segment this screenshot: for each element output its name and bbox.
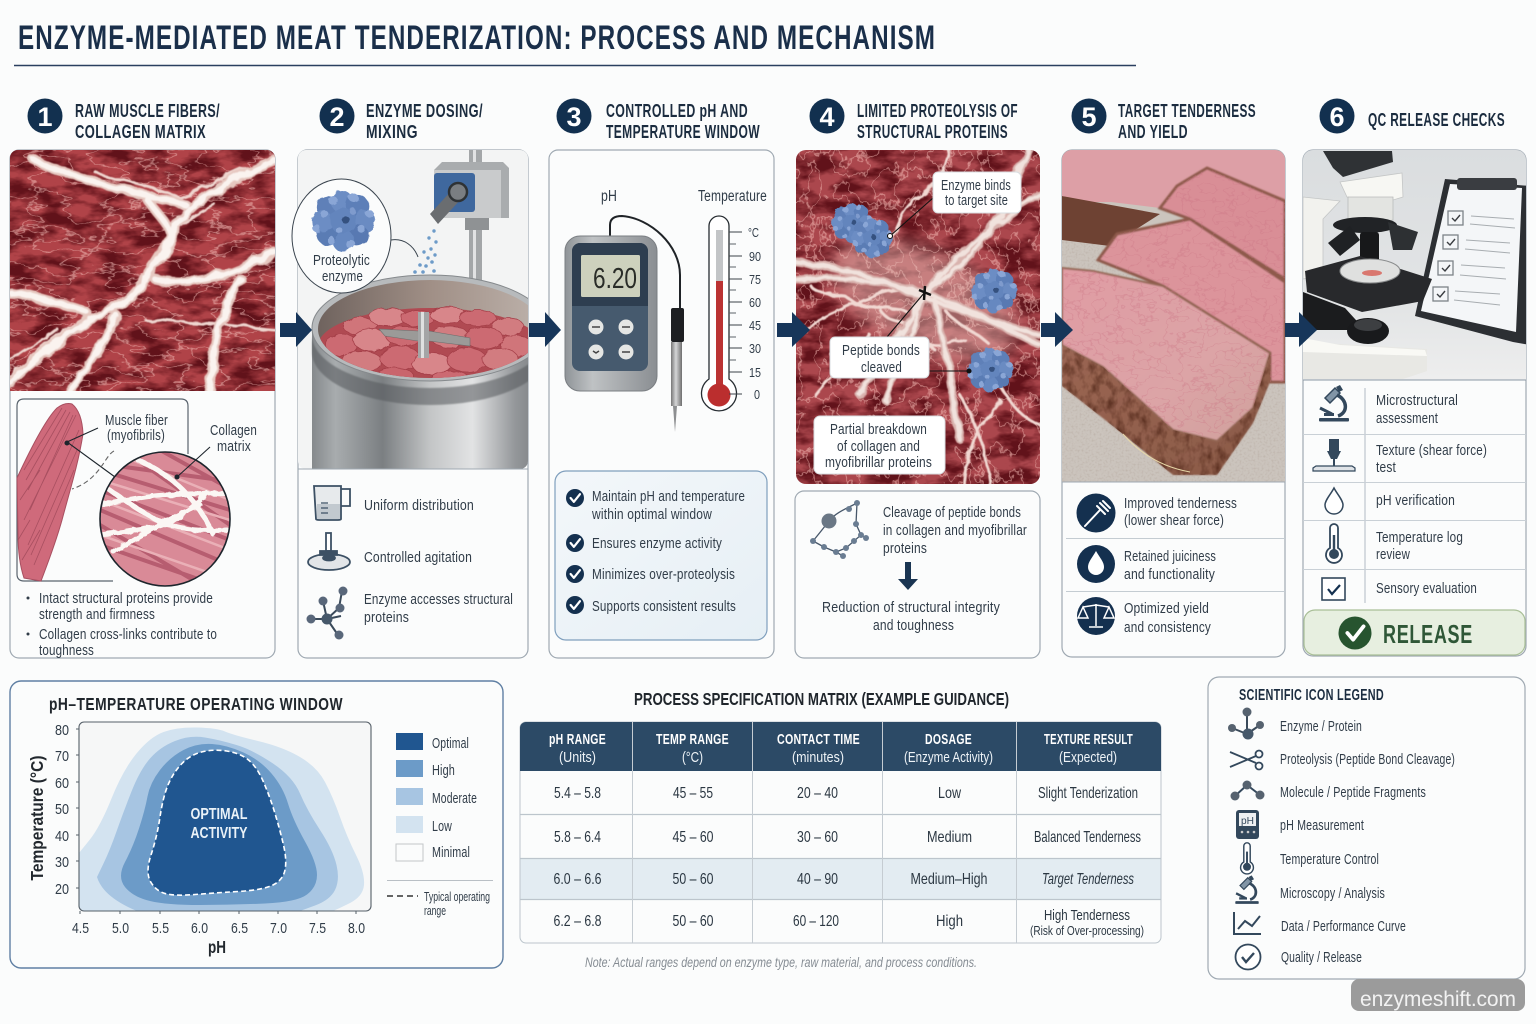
enzyme molecule upper left xyxy=(832,203,893,258)
step 6 heading xyxy=(1320,98,1505,134)
enzyme bubble callout: Proteolytic xyxy=(313,253,370,269)
icon: peptide fragment xyxy=(1230,780,1264,800)
enzyme molecule xyxy=(312,190,375,252)
table header xyxy=(549,732,1133,766)
thermometer: 75 xyxy=(749,272,761,287)
icon: enzyme protein xyxy=(1228,708,1264,740)
x axis labels: 6.5 xyxy=(231,920,248,937)
text: texture: Texture (shear force) xyxy=(1376,443,1487,459)
enzyme bubble callout: enzyme xyxy=(322,269,363,285)
icon: drop xyxy=(1077,545,1115,583)
labels: (myofibrils) xyxy=(107,428,165,444)
thermometer: °C xyxy=(748,225,759,240)
text: reduction xyxy=(822,600,1000,634)
row 3 highlighted xyxy=(554,871,1134,888)
row 4: High xyxy=(936,913,963,930)
row 4: 50 – 60 xyxy=(672,913,714,930)
step 2 heading xyxy=(320,98,483,142)
row 1: 45 – 55 xyxy=(673,785,713,802)
text: pH verification: pH verification xyxy=(1376,493,1455,509)
label: pH: pH xyxy=(601,188,617,205)
checklist text: Supports consistent results xyxy=(592,599,736,615)
row 1 xyxy=(554,785,1138,802)
step 1 heading xyxy=(28,98,220,142)
watermark: enzymeshift.com xyxy=(1360,988,1516,1011)
text: texture: test xyxy=(1376,460,1396,476)
check 1 xyxy=(566,489,584,507)
text: cleavage: Cleavage of peptide bonds xyxy=(883,505,1021,521)
bullet text: Collagen cross-links contribute to xyxy=(39,627,217,643)
scientific icon legend xyxy=(1208,677,1525,979)
callout: checklist xyxy=(555,471,767,640)
step 4 heading: LIMITED PROTEOLYSIS OF xyxy=(857,100,1018,121)
chart legend: Minimal xyxy=(432,845,470,861)
table header: (Expected) xyxy=(1059,750,1117,766)
icon: quality xyxy=(1236,944,1260,970)
callout: peptide bonds: Peptide bonds xyxy=(842,343,920,359)
y axis labels: 70 xyxy=(55,748,69,765)
icon: sensory check box xyxy=(1322,578,1345,600)
table header: (°C) xyxy=(682,750,703,766)
table header: DOSAGE xyxy=(925,732,972,748)
checklist text: Maintain pH and temperature xyxy=(592,489,745,505)
y axis labels: 40 xyxy=(55,828,69,845)
text: retained juiciness: and functionality xyxy=(1124,567,1215,583)
microscope xyxy=(1303,151,1432,379)
row 3 highlighted: Medium–High xyxy=(910,871,988,888)
chart legend: Typical operating xyxy=(424,890,490,904)
icon: droplet xyxy=(1325,488,1343,514)
center label: ACTIVITY xyxy=(190,825,248,842)
icon: beaker xyxy=(314,486,350,520)
row 3 highlighted: 6.0 – 6.6 xyxy=(554,871,602,888)
step 3 heading: 3 xyxy=(566,102,582,132)
photo: sliced steak xyxy=(1062,150,1285,482)
callout: peptide bonds: cleaved xyxy=(861,360,902,376)
clipboard xyxy=(1415,178,1530,345)
step 1 heading: 1 xyxy=(37,102,53,132)
row 2 xyxy=(554,829,1141,846)
table title: PROCESS SPECIFICATION MATRIX (EXAMPLE GUIDANCE) xyxy=(634,689,1009,709)
center label: OPTIMAL xyxy=(190,806,248,823)
chart legend: Optimal xyxy=(432,736,469,752)
bullet text: strength and firmness xyxy=(39,607,155,623)
x axis labels: 7.0 xyxy=(270,920,287,937)
step 5 column xyxy=(1062,98,1285,657)
row 4 xyxy=(554,907,1144,938)
x axis labels: 8.0 xyxy=(348,920,365,937)
panel: QC release xyxy=(1303,150,1526,656)
text: temperature control: Temperature Control xyxy=(1280,852,1379,868)
x axis labels: 5.0 xyxy=(112,920,129,937)
thermometer: 0 xyxy=(754,387,760,402)
thermometer: 30 xyxy=(749,341,761,356)
table header: TEXTURE RESULT xyxy=(1044,732,1133,748)
text: proteolysis: Proteolysis (Peptide Bond Cleavage) xyxy=(1280,752,1455,768)
step 6 heading: 6 xyxy=(1329,102,1345,132)
icon: pH device xyxy=(1236,810,1259,839)
icon: pH device: pH xyxy=(1241,816,1254,827)
checklist text: Ensures enzyme activity xyxy=(592,536,722,552)
icon: shear force probe xyxy=(1313,439,1355,471)
row 4: High Tenderness xyxy=(1044,907,1130,924)
y axis labels: 60 xyxy=(55,775,69,792)
row 3 highlighted: Target Tenderness xyxy=(1042,871,1134,888)
text: sensory evaluation: Sensory evaluation xyxy=(1376,581,1477,597)
table header: CONTACT TIME xyxy=(777,732,860,748)
label: temperature: Temperature xyxy=(698,188,767,205)
icon: scissors xyxy=(1230,750,1262,770)
text: reduction: Reduction of structural integrity xyxy=(822,600,1000,616)
labels xyxy=(105,413,257,455)
text: cleavage: in collagen and myofibrillar xyxy=(883,523,1027,539)
step 6 column xyxy=(1303,98,1530,656)
enzyme bubble callout xyxy=(292,179,418,293)
text: optimized yield xyxy=(1124,601,1211,636)
row 2: 5.8 – 6.4 xyxy=(554,829,601,846)
row 1: 5.4 – 5.8 xyxy=(554,785,601,802)
text: molecule: Molecule / Peptide Fragments xyxy=(1280,785,1426,801)
text: temperature log: review xyxy=(1376,547,1410,563)
row 3 highlighted: 40 – 90 xyxy=(797,871,838,888)
checklist text: within optimal window xyxy=(591,507,712,523)
y axis labels: 80 xyxy=(55,722,69,739)
callout: partial breakdown: myofibrillar proteins xyxy=(825,455,932,471)
watermark xyxy=(1351,979,1525,1011)
arrow 1 to 2 xyxy=(280,312,312,347)
x axis labels: 4.5 xyxy=(72,920,89,937)
row 2: 30 – 60 xyxy=(797,829,838,846)
center label xyxy=(190,806,248,842)
panel: pH temperature chart xyxy=(10,681,503,968)
chart legend: Low xyxy=(432,819,452,835)
arrow 2 to 3 xyxy=(529,312,561,347)
table xyxy=(520,722,1161,943)
table header: (minutes) xyxy=(792,750,844,766)
text: quality: Quality / Release xyxy=(1281,950,1362,966)
step 4 heading: STRUCTURAL PROTEINS xyxy=(857,121,1008,142)
legend title: SCIENTIFIC ICON LEGEND xyxy=(1239,687,1384,704)
stainless steel pot with meat xyxy=(312,275,548,469)
check 2 xyxy=(566,534,584,552)
y axis labels: 30 xyxy=(55,854,69,871)
icon: temperature xyxy=(1241,843,1253,874)
photo: microscope and clipboard xyxy=(1303,150,1530,380)
step 2 heading: ENZYME DOSING/ xyxy=(366,100,483,121)
text: improved tenderness: Improved tenderness xyxy=(1124,496,1237,512)
callout: enzyme binds: Enzyme binds xyxy=(941,178,1011,194)
icon: thermometer xyxy=(1326,524,1342,563)
arrow 4 to 5 xyxy=(1041,312,1073,347)
illustration: mixing vessel xyxy=(298,150,548,469)
text: pH measurement: pH Measurement xyxy=(1280,818,1364,834)
text: optimized yield: and consistency xyxy=(1124,620,1211,636)
step 3 column xyxy=(549,98,774,658)
checklist text xyxy=(591,489,745,615)
process specification matrix xyxy=(520,689,1161,970)
callout: partial breakdown: Partial breakdown xyxy=(830,422,927,438)
release badge: RELEASE xyxy=(1383,619,1473,649)
chart legend: range xyxy=(424,904,446,918)
labels: Collagen xyxy=(210,423,257,439)
x axis labels xyxy=(72,920,365,937)
row 1: Low xyxy=(938,785,961,802)
step 4 heading: 4 xyxy=(819,102,835,132)
pH meter: 6.20 xyxy=(593,263,637,295)
step 2 column xyxy=(292,98,548,658)
arrow 5 to 6 xyxy=(1285,312,1317,347)
text: optimized yield: Optimized yield xyxy=(1124,601,1209,617)
enzyme molecule lower right xyxy=(967,348,1013,392)
text: cleavage: proteins xyxy=(883,541,927,557)
arrow: down xyxy=(898,562,918,590)
impeller xyxy=(379,312,470,358)
step 3 heading: CONTROLLED pH AND xyxy=(606,100,748,121)
text: cleavage xyxy=(883,505,1027,557)
thermometer: 90 xyxy=(749,249,761,264)
row 1: 20 – 40 xyxy=(797,785,838,802)
x axis labels: 6.0 xyxy=(191,920,208,937)
step 5 heading: 5 xyxy=(1081,102,1097,132)
thermometer xyxy=(702,216,761,411)
row 2: 45 – 60 xyxy=(672,829,714,846)
y axis labels: 50 xyxy=(55,801,69,818)
photo: raw meat with collagen xyxy=(10,150,275,391)
step 5 heading: TARGET TENDERNESS xyxy=(1118,100,1256,121)
muscle fiber bundle xyxy=(17,404,83,581)
table header: TEMP RANGE xyxy=(656,732,729,748)
table header: (Enzyme Activity) xyxy=(904,750,993,766)
step 5 heading xyxy=(1072,98,1256,142)
arrows between steps xyxy=(280,312,1317,347)
step 5 heading: AND YIELD xyxy=(1118,121,1188,142)
check 3 xyxy=(566,565,584,583)
callout: partial breakdown xyxy=(814,416,945,474)
text: texture xyxy=(1376,443,1487,476)
step 3 heading: TEMPERATURE WINDOW xyxy=(606,121,760,142)
icon: microscopy xyxy=(1235,875,1259,904)
step 2 heading: 2 xyxy=(329,102,345,132)
panel: raw muscle fibers xyxy=(10,150,275,658)
step 1 heading: COLLAGEN MATRIX xyxy=(75,121,206,142)
y axis labels: 20 xyxy=(55,881,69,898)
arrow 3 to 4 xyxy=(777,312,810,347)
pH meter xyxy=(565,216,684,432)
magnified collagen circle xyxy=(100,450,232,590)
text: enzyme accesses: Enzyme accesses structural xyxy=(364,592,513,608)
text: enzyme protein: Enzyme / Protein xyxy=(1280,719,1362,735)
chart legend: Moderate xyxy=(432,791,477,807)
panel: enzyme dosing xyxy=(298,150,528,658)
icon: microscope xyxy=(1319,385,1349,422)
text: controlled agitation: Controlled agitation xyxy=(364,550,472,566)
text: uniform distribution: Uniform distribution xyxy=(364,498,474,514)
row 4: 6.2 – 6.8 xyxy=(554,913,602,930)
icon: fork xyxy=(1076,494,1116,532)
row 4: 60 – 120 xyxy=(793,913,839,930)
enzyme molecule right xyxy=(971,269,1017,313)
table note: Note: Actual ranges depend on enzyme type, raw material, and process conditions. xyxy=(585,955,977,970)
callout: enzyme binds xyxy=(933,172,1021,213)
text: enzyme accesses: proteins xyxy=(364,610,409,626)
text: enzyme accesses xyxy=(364,592,513,626)
icon: agitator xyxy=(308,533,350,570)
step 2 heading: MIXING xyxy=(366,121,418,142)
chart legend xyxy=(387,733,493,918)
text: temperature log xyxy=(1376,530,1463,563)
row 3 highlighted: 50 – 60 xyxy=(672,871,714,888)
icon: performance curve xyxy=(1234,912,1261,934)
chart legend: High xyxy=(432,763,455,779)
thermometer: 60 xyxy=(749,295,761,310)
step 1 column xyxy=(10,98,275,659)
text: data curve: Data / Performance Curve xyxy=(1281,919,1406,935)
text: microscopy: Microscopy / Analysis xyxy=(1280,886,1385,902)
callout: peptide bonds xyxy=(830,337,929,378)
text: improved tenderness xyxy=(1124,496,1237,529)
text: temperature log: Temperature log xyxy=(1376,530,1463,546)
row 4: (Risk of Over-processing) xyxy=(1030,923,1144,938)
x axis labels: 7.5 xyxy=(309,920,326,937)
icon: balance scale xyxy=(1077,597,1115,635)
step 1 heading: RAW MUSCLE FIBERS/ xyxy=(75,100,220,121)
row 2: Balanced Tenderness xyxy=(1034,829,1141,846)
table header: pH RANGE xyxy=(549,732,606,748)
release badge xyxy=(1304,610,1525,655)
row 1: Slight Tenderization xyxy=(1038,785,1138,802)
panel: target tenderness xyxy=(1062,150,1285,657)
checklist text: Minimizes over-proteolysis xyxy=(592,567,735,583)
text: reduction: and toughness xyxy=(873,618,954,634)
thermometer: 15 xyxy=(749,365,761,380)
callout leaders xyxy=(65,428,210,489)
callout: partial breakdown: of collagen and xyxy=(837,439,920,455)
x axis title: pH xyxy=(208,937,226,957)
check 4 xyxy=(566,596,584,614)
inset: muscle fiber diagram xyxy=(17,399,257,590)
row 2: Medium xyxy=(927,829,972,846)
callout: enzyme binds: to target site xyxy=(945,193,1008,209)
y axis labels xyxy=(55,722,69,898)
panel: cleavage explanation xyxy=(795,491,1040,658)
y axis title: Temperature (°C) xyxy=(27,756,47,880)
bullet text: toughness xyxy=(39,643,94,659)
photo: proteolysis close-up xyxy=(796,150,1040,484)
icon: peptide chain xyxy=(810,500,869,559)
mixer column and motor xyxy=(430,150,509,280)
step 3 heading xyxy=(556,98,760,142)
labels: matrix xyxy=(217,439,251,455)
bullet text: Intact structural proteins provide xyxy=(39,591,213,607)
enzyme droplets xyxy=(413,229,438,274)
chart title: pH–TEMPERATURE OPERATING WINDOW xyxy=(49,694,343,714)
contour chart xyxy=(27,722,371,957)
text: retained juiciness: Retained juiciness xyxy=(1124,549,1216,565)
panel: controlled window xyxy=(549,150,774,658)
text: microstructural: Microstructural xyxy=(1376,393,1458,409)
x axis labels: 5.5 xyxy=(152,920,169,937)
text: microstructural xyxy=(1376,393,1458,427)
text: microstructural: assessment xyxy=(1376,411,1438,427)
text: improved tenderness: (lower shear force) xyxy=(1124,513,1224,529)
title: ENZYME-MEDIATED MEAT TENDERIZATION: PROCESS AND MECHANISM xyxy=(18,19,936,57)
step 4 column xyxy=(795,98,1040,658)
thermometer: 45 xyxy=(749,318,761,333)
labels: Muscle fiber xyxy=(105,413,168,429)
leader lines and cleavage mark xyxy=(887,198,971,373)
table header: (Units) xyxy=(559,750,596,766)
icon: molecule network xyxy=(306,586,348,640)
step 4 heading xyxy=(810,98,1018,142)
bullet text xyxy=(26,591,217,659)
text: retained juiciness xyxy=(1124,549,1216,583)
